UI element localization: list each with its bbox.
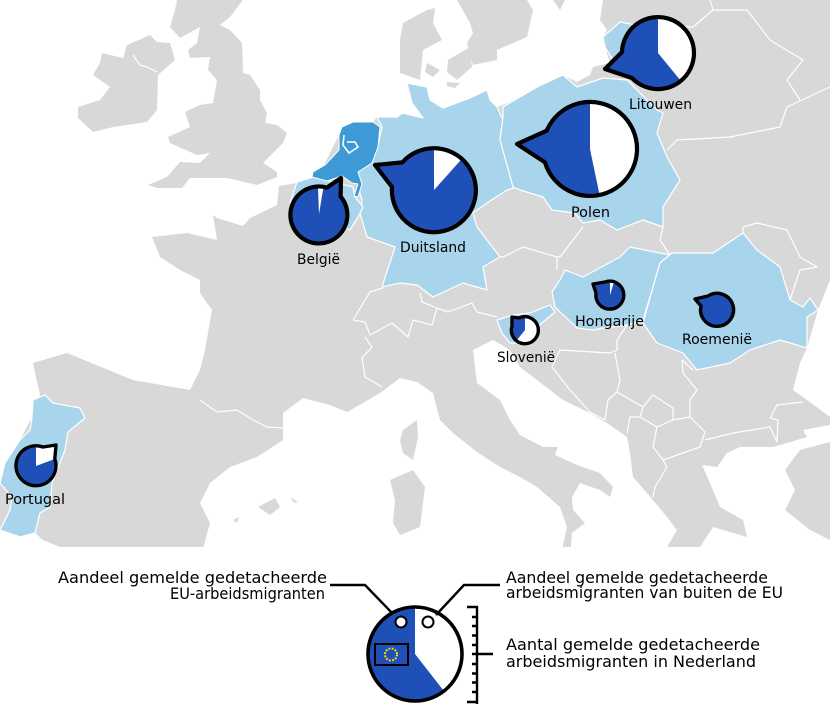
- Anatolia: [785, 442, 830, 540]
- legend text: number of migrants: Aantal gemelde gedetacheerde: [506, 635, 760, 654]
- pie: Litouwen: [605, 17, 694, 89]
- Germany: [358, 83, 518, 297]
- Belgium: [290, 177, 363, 230]
- label: België: België: [297, 252, 340, 268]
- Mediterranean islands: [233, 420, 425, 535]
- label: Duitsland: Duitsland: [400, 240, 466, 256]
- Portugal: [0, 395, 85, 537]
- label: Litouwen: Litouwen: [629, 97, 692, 113]
- pie: Duitsland: [375, 148, 476, 232]
- label: Hongarije: Hongarije: [575, 314, 644, 330]
- leader line: non-EU share: [422, 585, 500, 628]
- label: Roemenië: Roemenië: [682, 332, 752, 348]
- pie: Portugal: [16, 445, 56, 486]
- pie: Hongarije: [593, 281, 624, 309]
- pie: Roemenië: [695, 293, 734, 326]
- legend pie: [368, 607, 462, 701]
- legend text: number of migrants: [506, 635, 760, 671]
- map of Europe: [0, 0, 830, 560]
- legend text: non-EU share: arbeidsmigranten van buiten de EU: [506, 583, 783, 602]
- legend: [58, 568, 783, 704]
- mainland Europe: [0, 0, 830, 560]
- leader line: EU share: [330, 585, 406, 628]
- Great Britain: [148, 0, 287, 188]
- legend text: non-EU share: [506, 568, 783, 602]
- Romania: [643, 233, 818, 370]
- Slovenia: [497, 305, 555, 343]
- highlighted countries: [0, 22, 818, 537]
- Scandinavia and Denmark: [400, 0, 565, 88]
- country borders: [133, 0, 830, 497]
- Lithuania: [603, 22, 634, 60]
- pie: België: [290, 178, 347, 243]
- label: Slovenië: Slovenië: [497, 350, 555, 366]
- legend text: number of migrants: arbeidsmigranten in Nederland: [506, 652, 756, 671]
- label: Portugal: Portugal: [5, 492, 65, 508]
- legend text: non-EU share: Aandeel gemelde gedetacheerde: [506, 568, 768, 587]
- scale ruler: [467, 607, 493, 704]
- legend text: EU share: [58, 568, 327, 603]
- icon: EU flag: [375, 644, 408, 665]
- label: Polen: Polen: [571, 205, 610, 221]
- pie: Polen: [517, 102, 637, 196]
- Poland: [500, 75, 680, 230]
- Hungary: [552, 247, 670, 330]
- pie: Slovenië: [511, 316, 538, 344]
- Ireland: [78, 35, 175, 132]
- legend text: EU share: EU-arbeidsmigranten: [170, 584, 325, 603]
- Netherlands: [312, 122, 380, 197]
- legend text: EU share: Aandeel gemelde gedetacheerde: [58, 568, 327, 587]
